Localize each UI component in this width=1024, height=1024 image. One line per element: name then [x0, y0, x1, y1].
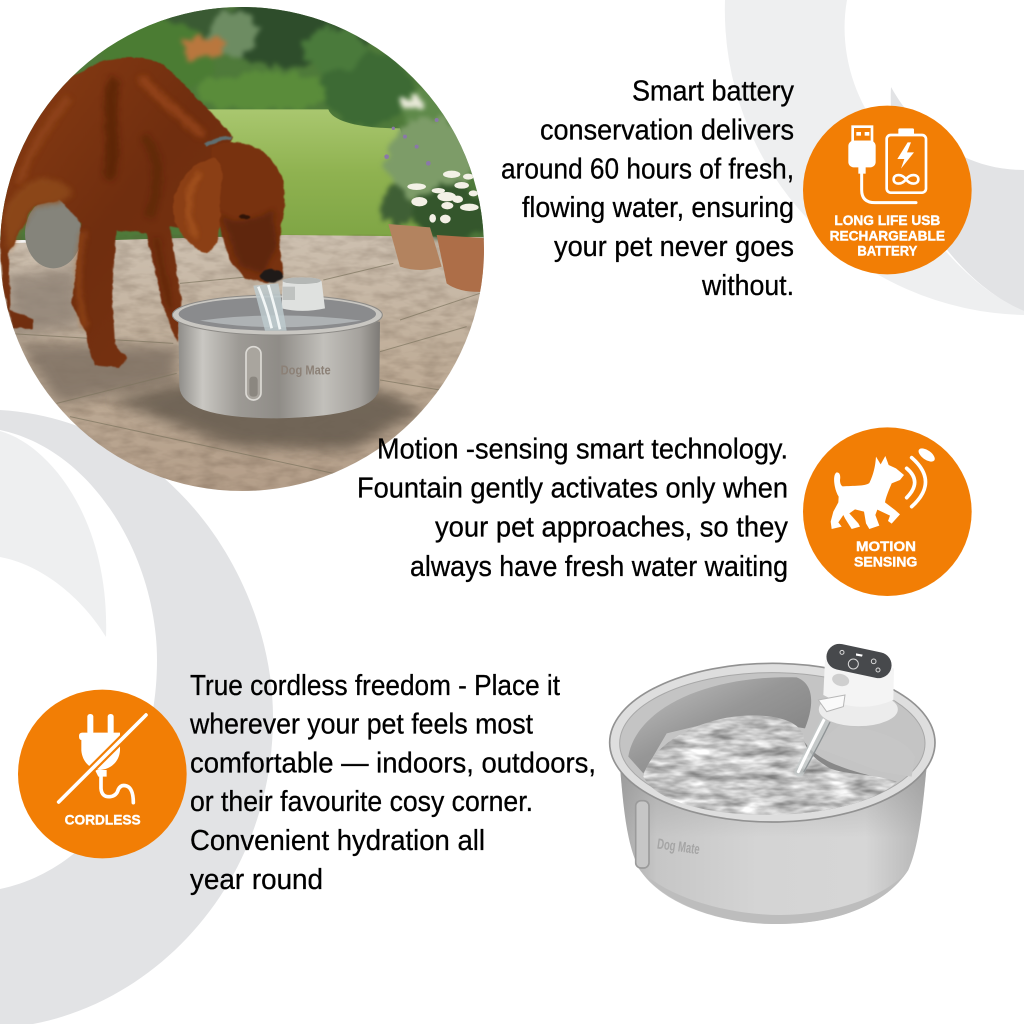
water stream: [253, 283, 287, 331]
text block: battery conservation: around 60 hours of fresh,: [501, 153, 794, 185]
text block: motion sensing: your pet approaches, so they: [435, 512, 788, 544]
badge label: CORDLESS: [65, 812, 141, 828]
text block: motion sensing: [357, 434, 788, 583]
text block: battery conservation: [501, 76, 794, 302]
background swirl: bottom left: [0, 410, 273, 1024]
fountain module: [282, 277, 325, 311]
ear: [173, 157, 222, 252]
flower pots and plants: [380, 117, 488, 292]
water surface: [643, 716, 897, 815]
inner wall: [628, 677, 811, 773]
background swirl: top right: [725, 0, 1024, 315]
water level window: [246, 347, 261, 400]
badge label: MOTION: [856, 538, 916, 554]
garden background: [0, 0, 500, 240]
water stream: [798, 703, 837, 772]
text block: battery conservation: conservation delivers: [540, 114, 794, 146]
text block: motion sensing: Fountain gently activates only when: [357, 472, 788, 504]
text block: battery conservation: without.: [701, 270, 794, 302]
text block: battery conservation: Smart battery: [632, 76, 794, 108]
text block: cordless freedom: year round: [190, 864, 323, 896]
text block: motion sensing: always have fresh water waiting: [410, 551, 788, 583]
text block: battery conservation: your pet never goes: [554, 231, 794, 263]
stone ball planter: [25, 198, 82, 268]
bowl rim: [610, 663, 935, 822]
badge: motion sensing: [803, 427, 972, 596]
badge label: [830, 212, 945, 259]
brand mark: Dog Mate: [656, 836, 701, 858]
bowl body: [620, 767, 927, 924]
photo: dog drinking from fountain on a garden patio: [0, 0, 500, 500]
icon: crossed-out plug: [55, 711, 150, 806]
badge label: BATTERY: [857, 243, 918, 259]
text block: cordless freedom: wherever your pet feels most: [189, 708, 533, 740]
brand mark: Dog Mate: [281, 364, 331, 378]
badge: long life USB rechargeable battery: [803, 106, 972, 274]
nose: [261, 269, 283, 283]
icon: dog with motion waves: [831, 446, 937, 529]
dog: [0, 57, 285, 368]
text block: cordless freedom: Convenient hydration all: [190, 825, 485, 857]
control panel: [824, 641, 894, 681]
badge label: [854, 538, 917, 570]
text block: cordless freedom: [189, 670, 596, 896]
lawn: [207, 109, 433, 237]
text block: cordless freedom: True cordless freedom - Place it: [190, 670, 560, 702]
bowl interior: [620, 673, 925, 814]
patio: [0, 235, 500, 500]
text block: motion sensing: Motion -sensing smart technology.: [377, 434, 788, 466]
collar: [204, 136, 233, 148]
head: [218, 141, 286, 284]
text block: cordless freedom: or their favourite cosy corner.: [190, 786, 533, 818]
text block: cordless freedom: comfortable — indoors, outdoors,: [190, 747, 596, 779]
stainless fountain bowl: [172, 277, 382, 418]
product photo: stainless steel fountain bowl: [610, 641, 935, 924]
badge label: LONG LIFE USB: [834, 212, 940, 228]
badge: cordless: [18, 690, 187, 858]
text block: battery conservation: flowing water, ensuring: [522, 192, 794, 224]
water level window: [636, 801, 649, 868]
badge label: SENSING: [854, 554, 917, 570]
icon: USB cable and battery: [848, 127, 926, 203]
fountain module: [818, 641, 898, 727]
badge label: RECHARGEABLE: [830, 228, 945, 244]
